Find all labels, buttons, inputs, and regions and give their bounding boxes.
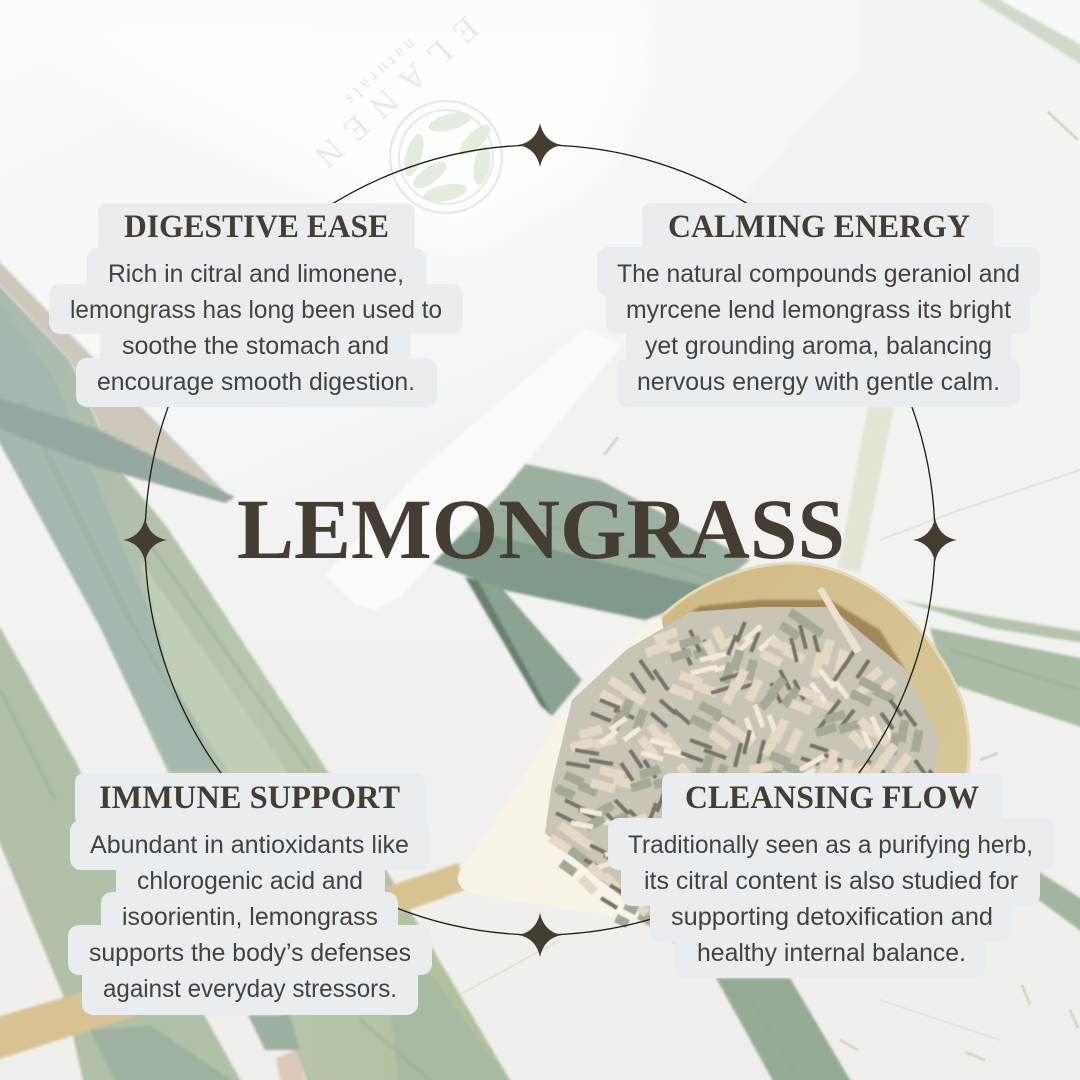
text: digestive ease body: encourage smooth digestion. bbox=[97, 368, 415, 396]
text: digestive ease body: Rich in citral and limonene, bbox=[108, 260, 404, 288]
text: cleansing flow body: Traditionally seen as a purifying herb, bbox=[628, 831, 1033, 859]
text: digestive ease body: lemongrass has long been used to bbox=[70, 296, 442, 324]
pouch logo: Elanen naturals: ELANEN bbox=[297, 9, 485, 184]
text: calming energy body: The natural compounds geraniol and bbox=[617, 260, 1020, 288]
star: right bbox=[913, 518, 957, 562]
text: immune support body: against everyday stressors. bbox=[103, 975, 397, 1003]
text: digestive ease body: soothe the stomach and bbox=[122, 332, 389, 360]
panel: digestive ease bbox=[49, 203, 463, 407]
panel: immune support bbox=[68, 773, 432, 1015]
text: cleansing flow body: supporting detoxification and bbox=[671, 903, 993, 931]
heading: immune support: IMMUNE SUPPORT bbox=[99, 780, 400, 816]
gold spoon with dried lemongrass bbox=[458, 563, 969, 960]
heading: calming energy: CALMING ENERGY bbox=[668, 209, 970, 245]
star: left bbox=[123, 518, 167, 562]
star: top bbox=[518, 123, 562, 167]
panel: calming energy bbox=[597, 203, 1040, 407]
circle connector line bbox=[145, 145, 935, 935]
text: calming energy body: yet grounding aroma, balancing bbox=[645, 332, 992, 360]
text: immune support body: isoorientin, lemongrass bbox=[122, 903, 378, 931]
pouch logo: Elanen naturals: naturals bbox=[338, 35, 420, 112]
heading: digestive ease: DIGESTIVE EASE bbox=[124, 209, 389, 245]
text: immune support body: Abundant in antioxidants like bbox=[90, 831, 409, 859]
heading: cleansing flow: CLEANSING FLOW bbox=[685, 780, 979, 816]
text: cleansing flow body bbox=[628, 831, 1033, 967]
text: immune support body: chlorogenic acid and bbox=[137, 867, 363, 895]
text: immune support body: supports the body’s defenses bbox=[89, 939, 411, 967]
panel: cleansing flow bbox=[608, 773, 1055, 978]
text: calming energy body bbox=[617, 260, 1020, 396]
text: calming energy body: myrcene lend lemongrass its bright bbox=[626, 296, 1011, 324]
product pouch bbox=[0, 0, 860, 612]
text: cleansing flow body: healthy internal balance. bbox=[697, 939, 966, 967]
star: bottom bbox=[518, 913, 562, 957]
text: cleansing flow body: its citral content is also studied for bbox=[644, 867, 1018, 895]
text: digestive ease body bbox=[70, 260, 442, 396]
text: immune support body bbox=[89, 831, 411, 1003]
text: calming energy body: nervous energy with gentle calm. bbox=[637, 368, 1000, 396]
title: LEMONGRASS bbox=[237, 481, 845, 577]
